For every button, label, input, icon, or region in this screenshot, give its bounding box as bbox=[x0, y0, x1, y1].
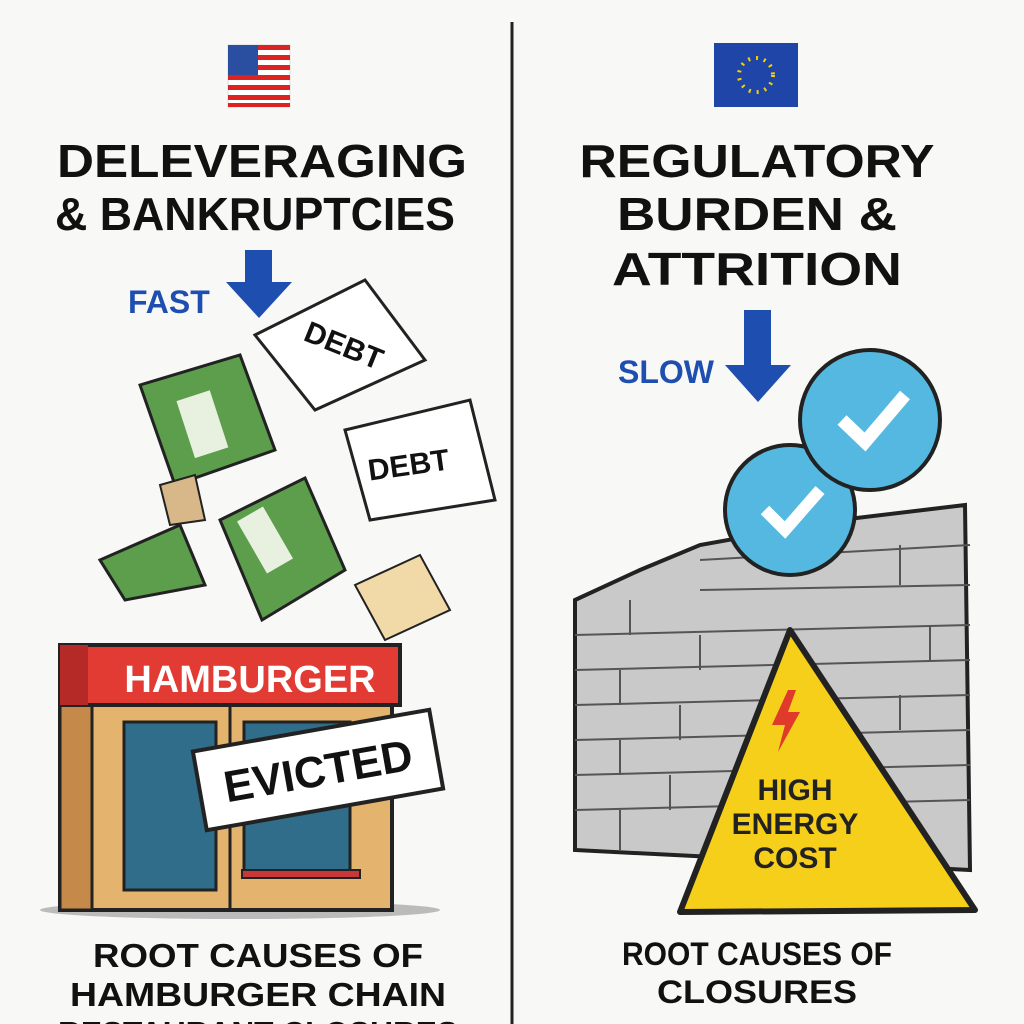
title: right: ATTRITION bbox=[612, 243, 902, 295]
icon: warning triangle: COST bbox=[753, 842, 837, 875]
title: right: BURDEN & bbox=[617, 188, 897, 240]
label: SLOW: SLOW bbox=[618, 354, 715, 390]
icon: warning triangle: HIGH bbox=[758, 774, 832, 807]
title: right bbox=[580, 135, 934, 295]
title: right: REGULATORY bbox=[580, 135, 934, 187]
illustration: debt papers and money: DEBT bbox=[366, 444, 451, 488]
illustration: brick wall bbox=[575, 505, 970, 870]
title: left: & BANKRUPTCIES bbox=[55, 188, 455, 240]
caption: left: ROOT CAUSES OF bbox=[93, 937, 423, 974]
icon: US flag bbox=[228, 45, 290, 107]
icon: warning triangle bbox=[680, 630, 975, 912]
illustration: hamburger store bbox=[40, 645, 443, 919]
icon: approval badges bbox=[725, 350, 940, 575]
label: FAST: FAST bbox=[128, 284, 210, 320]
illustration: debt papers and money bbox=[100, 280, 495, 640]
icon: warning triangle: ENERGY bbox=[732, 808, 858, 841]
icon: EU flag bbox=[714, 43, 798, 107]
caption: right bbox=[622, 936, 892, 1010]
title: left: DELEVERAGING bbox=[57, 135, 467, 187]
caption: right: ROOT CAUSES OF bbox=[622, 936, 892, 972]
caption: left bbox=[58, 937, 458, 1024]
arrow: right down bbox=[725, 310, 791, 402]
illustration: hamburger store: HAMBURGER bbox=[124, 659, 376, 701]
caption: left: HAMBURGER CHAIN bbox=[70, 976, 446, 1013]
illustration: debt papers and money: DEBT bbox=[300, 316, 388, 377]
title: left bbox=[55, 135, 467, 240]
caption: right: CLOSURES bbox=[657, 974, 857, 1010]
arrow: left down bbox=[226, 250, 292, 318]
illustration: hamburger store: EVICTED bbox=[220, 731, 416, 812]
